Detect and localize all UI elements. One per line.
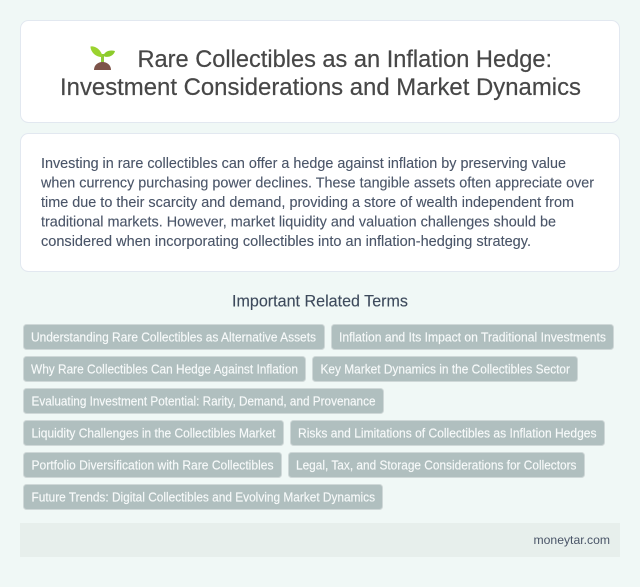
tag: Understanding Rare Collectibles as Alternative Assets [31,330,316,344]
tag [24,452,282,478]
tag: Key Market Dynamics in the Collectibles Sector [320,362,570,376]
text block: introduction [40,156,594,250]
tag [332,324,614,350]
tag: Future Trends: Digital Collectibles and Evolving Market Dynamics [32,490,375,504]
tag: Liquidity Challenges in the Collectibles Market [32,426,276,440]
title: Investment Considerations and Market Dynamics [60,74,581,101]
text block: introduction: Investing in rare collectibles can offer a hedge against inflation by preserving value [41,156,566,172]
footer [20,523,620,557]
title: Rare Collectibles as an Inflation Hedge: [138,46,552,73]
tag [312,356,578,382]
tag: Legal, Tax, and Storage Considerations for Collectors [296,458,576,472]
tag: Risks and Limitations of Collectibles as Inflation Hedges [298,426,596,440]
tag: Portfolio Diversification with Rare Collectibles [32,458,274,472]
tag [24,484,382,510]
tag [288,452,584,478]
heading: important related terms: Important Related Terms [232,292,408,310]
title [60,46,581,101]
tag [24,356,306,382]
text block: introduction: considered when incorporating collectibles into an inflation-hedging strategy. [41,234,531,250]
text block: introduction: when currency purchasing power declines. These tangible assets often appreciate over [40,176,594,192]
tag: Inflation and Its Impact on Traditional Investments [339,330,606,344]
tag [24,324,324,350]
icon: seedling [90,46,115,70]
tag: Evaluating Investment Potential: Rarity, Demand, and Provenance [32,394,376,408]
tag [24,420,284,446]
tag: Why Rare Collectibles Can Hedge Against Inflation [31,362,298,376]
panel: introduction [20,134,620,272]
panel: title card [20,20,620,122]
text block: introduction: traditional markets. However, market liquidity and valuation challenges should be [41,214,556,230]
tag [24,388,384,414]
text block: introduction: time due to their scarcity and demand, providing a store of wealth independent from [41,195,574,211]
tag [290,420,604,446]
footer: source: moneytar.com [534,533,610,547]
tag list [24,324,614,510]
